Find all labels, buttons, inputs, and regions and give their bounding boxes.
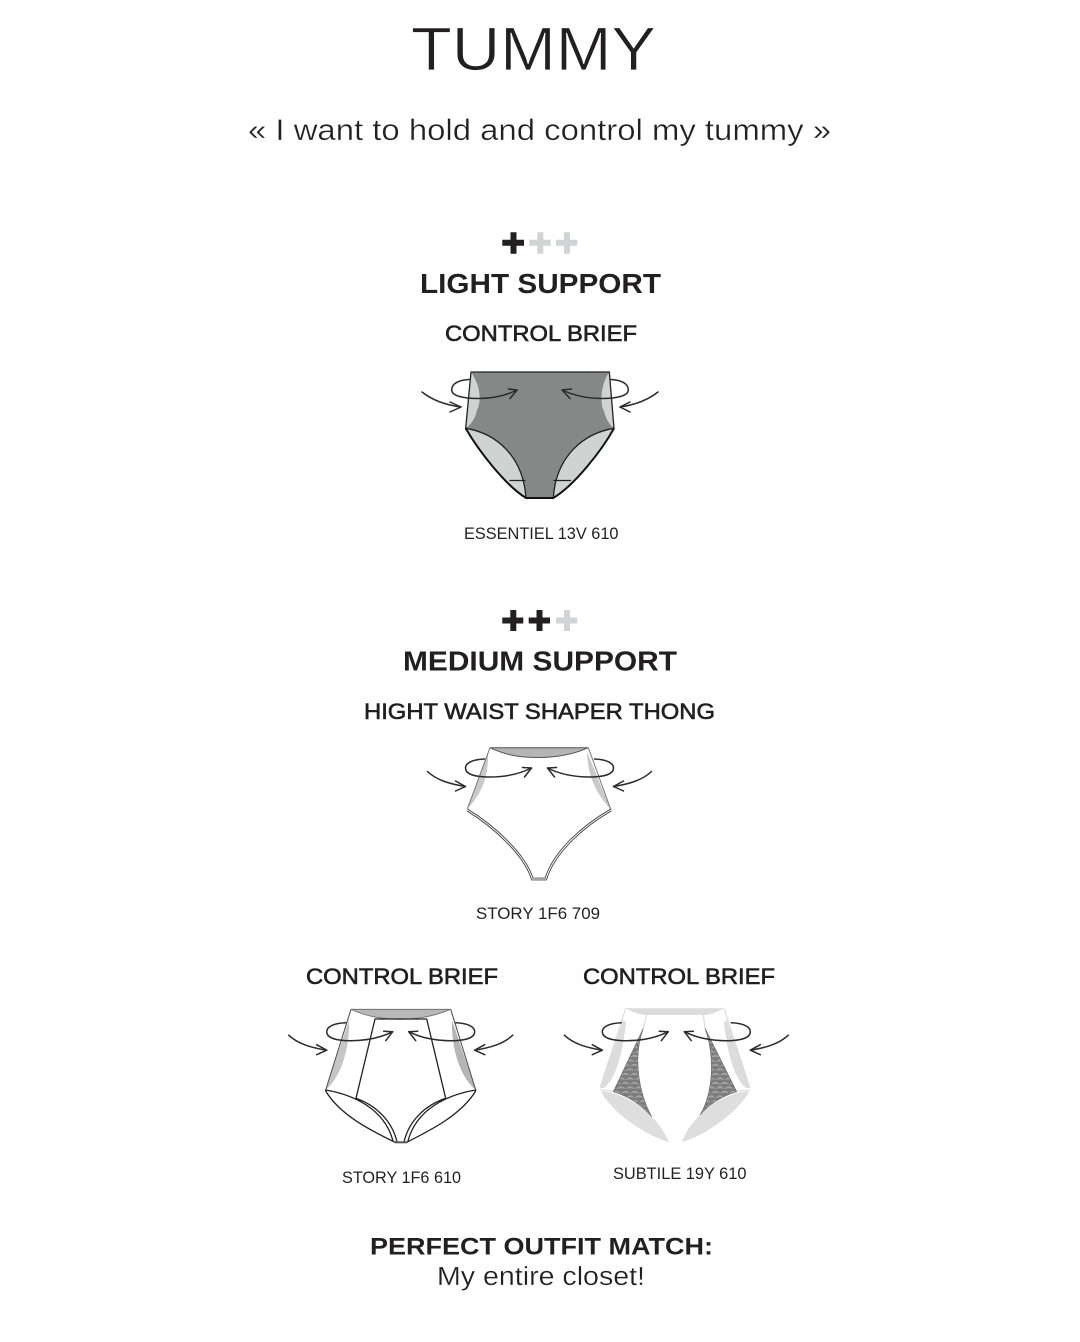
product reference: story thong: STORY 1F6 709: [476, 905, 600, 923]
heading: light support: LIGHT SUPPORT: [420, 268, 661, 299]
text: my entire closet: My entire closet!: [437, 1263, 645, 1291]
garment: subtile control brief: [564, 1008, 788, 1142]
heading: perfect outfit match: PERFECT OUTFIT MATCH:: [370, 1234, 713, 1260]
heading: medium support: MEDIUM SUPPORT: [403, 646, 677, 676]
product reference: subtile: SUBTILE 19Y 610: [613, 1165, 746, 1183]
title: TUMMY: [411, 15, 656, 83]
icon: support rating two of three: [502, 610, 577, 631]
icon: support rating one of three: [502, 232, 577, 254]
outfit match text block: [370, 1234, 713, 1291]
section: medium support: [364, 610, 715, 923]
product reference: story brief: STORY 1F6 610: [342, 1169, 461, 1187]
product name: control brief right: CONTROL BRIEF: [583, 964, 775, 989]
product reference: essentiel: ESSENTIEL 13V 610: [464, 525, 618, 543]
product: story control brief: [289, 964, 513, 1187]
product name: control brief left: CONTROL BRIEF: [306, 964, 498, 989]
product name: high waist shaper thong: HIGHT WAIST SHAPER THONG: [364, 699, 715, 724]
product name: control brief: CONTROL BRIEF: [445, 321, 637, 346]
garment: story shaper thong: [428, 748, 652, 879]
garment: essentiel control brief: [422, 372, 658, 498]
quote subtitle: « I want to hold and control my tummy »: [248, 114, 831, 147]
product: subtile control brief: [564, 964, 788, 1183]
section: light support: [420, 232, 661, 543]
garment: story control brief: [289, 1009, 513, 1142]
